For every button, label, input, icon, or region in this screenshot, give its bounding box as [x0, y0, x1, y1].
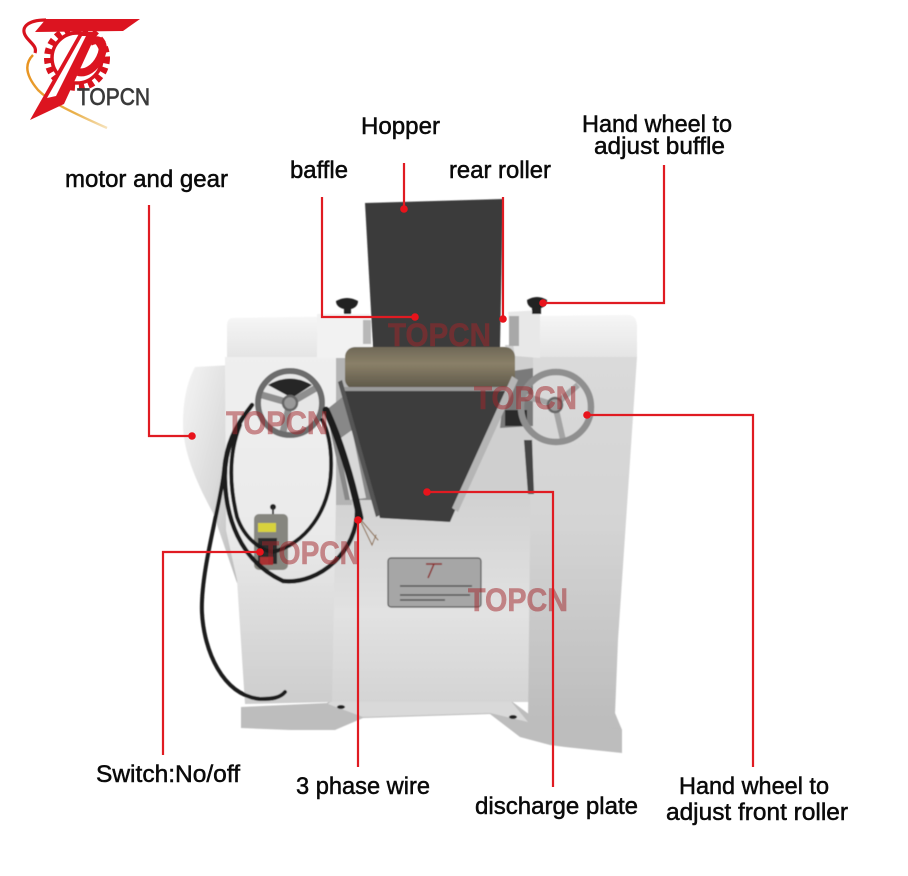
right hand wheel: [521, 372, 591, 442]
logo: gear: [48, 29, 106, 87]
callout: 3 phase wire: 3 phase wire: [296, 773, 430, 800]
callout: motor and gear: motor and gear: [65, 166, 228, 193]
bolts: [337, 705, 345, 709]
callout: switch: [96, 548, 264, 788]
base: [241, 692, 622, 753]
logo: pen stem: [30, 32, 97, 120]
switch box: [254, 504, 288, 570]
bracket right: [508, 310, 540, 358]
callout: hand wheel to adjust buffle: [539, 111, 732, 307]
mechanism right: [466, 345, 533, 490]
left tower: [225, 357, 336, 704]
knob right: [527, 297, 547, 314]
knob left: [336, 298, 358, 314]
callout: discharge plate: discharge plate: [475, 793, 638, 820]
motor housing: [183, 365, 240, 583]
watermark 3: TOPCN: [226, 405, 328, 441]
watermarks: [226, 317, 577, 618]
left hand wheel: [258, 371, 322, 435]
callout: discharge plate: [423, 488, 638, 820]
nameplate: [388, 558, 481, 607]
left tower cap: [227, 316, 364, 358]
callout: motor and gear: [65, 166, 228, 440]
power cables: [202, 405, 378, 699]
callout: hand wheel to adjust buffle: Hand wheel to: [582, 111, 732, 138]
machine photo: [183, 199, 637, 753]
callout: rear roller: rear roller: [449, 157, 551, 184]
callout: hand wheel to adjust front roller: Hand wheel to: [679, 773, 829, 800]
callout: switch: Switch:No/off: [96, 761, 240, 788]
watermark 4: TOPCN: [262, 535, 360, 571]
discharge side rails: [452, 376, 518, 512]
watermark 5: TOPCN: [468, 582, 568, 618]
watermark 2: TOPCN: [474, 380, 577, 416]
logo: wordmark: TOPCN: [77, 84, 150, 111]
callout: hopper: [361, 113, 440, 213]
roller: [345, 347, 515, 389]
logo: TOPCN: [24, 19, 150, 128]
logo: orange swoosh: [27, 55, 107, 128]
centre panel: [317, 480, 533, 702]
bracket left: [317, 314, 372, 358]
callout: baffle: baffle: [290, 157, 348, 184]
callout: hand wheel to adjust buffle: adjust buffle: [594, 133, 725, 160]
callout: hopper: Hopper: [361, 113, 440, 140]
right tower: [528, 357, 637, 730]
callout: hand wheel to adjust front roller: adjust front roller: [666, 799, 848, 826]
callout: hand wheel to adjust front roller: [583, 411, 848, 826]
right tower cap: [538, 315, 637, 358]
callout: 3 phase wire: [296, 516, 430, 800]
mechanism left: [336, 355, 352, 505]
logo: red swirl and T bar: [24, 20, 46, 53]
base floor: [328, 692, 528, 722]
discharge plate: [343, 388, 508, 522]
callout: rear roller: [449, 157, 551, 323]
watermark 1: TOPCN: [388, 317, 491, 353]
hopper: [365, 199, 503, 347]
callout: baffle: [290, 157, 419, 321]
